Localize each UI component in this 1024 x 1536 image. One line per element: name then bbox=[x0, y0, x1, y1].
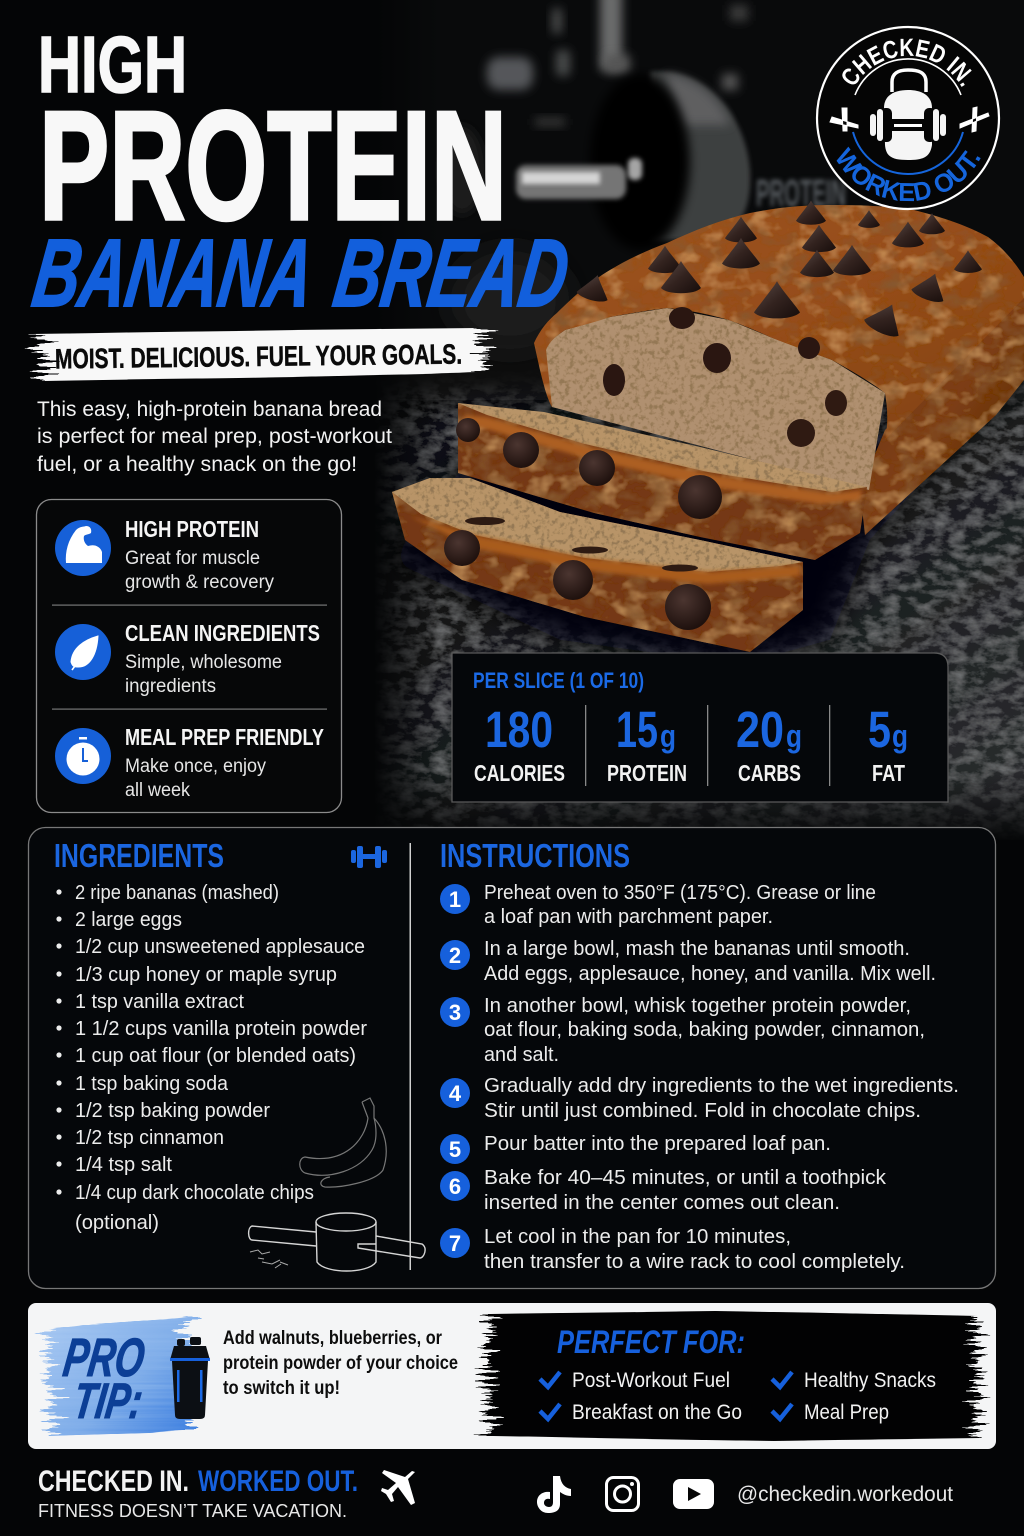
logo badge bbox=[816, 26, 1000, 210]
footer brand line: FITNESS DOESN’T TAKE VACATION. bbox=[38, 1501, 347, 1521]
instruction numbers: 7 bbox=[449, 1231, 461, 1256]
benefit: high protein: growth & recovery bbox=[125, 572, 274, 593]
illustration: bananas bbox=[300, 1098, 386, 1187]
ingredients list: 2 large eggs bbox=[75, 909, 182, 931]
ingredients list: 1 tsp baking soda bbox=[75, 1073, 229, 1095]
ingredients list: 1/4 cup dark chocolate chips bbox=[75, 1182, 314, 1204]
perfect for heading: PERFECT FOR: bbox=[557, 1324, 745, 1360]
ingredients list bbox=[56, 882, 367, 1234]
stat: calories: 180 bbox=[485, 701, 553, 758]
perfect for checklist bbox=[540, 1369, 936, 1424]
stat: carbs: g bbox=[786, 718, 802, 754]
panel: benefits bbox=[36, 500, 342, 812]
perfect for checklist: Meal Prep bbox=[804, 1401, 889, 1424]
left dark fade bbox=[0, 0, 440, 842]
intro text bbox=[37, 398, 392, 476]
stat: calories: CALORIES bbox=[474, 760, 565, 786]
stat: protein: PROTEIN bbox=[607, 760, 687, 786]
icon: youtube bbox=[673, 1479, 714, 1509]
instruction numbers: 1 bbox=[449, 887, 461, 912]
icon: plane bbox=[381, 1470, 415, 1505]
ingredients heading: INGREDIENTS bbox=[54, 837, 224, 874]
benefit: high protein: Great for muscle bbox=[125, 548, 260, 569]
pro tip text bbox=[223, 1328, 458, 1399]
instruction steps: and salt. bbox=[484, 1044, 559, 1066]
instruction steps: Stir until just combined. Fold in chocolate chips. bbox=[484, 1100, 921, 1122]
instructions heading: INSTRUCTIONS bbox=[440, 837, 630, 874]
instruction steps bbox=[484, 882, 959, 1273]
title bbox=[27, 20, 575, 327]
panel: nutrition per slice: PER SLICE (1 OF 10) bbox=[473, 668, 644, 693]
stat: protein: g bbox=[660, 718, 676, 754]
instruction steps: a loaf pan with parchment paper. bbox=[484, 906, 773, 928]
instruction steps: Bake for 40–45 minutes, or until a toothpick bbox=[484, 1167, 887, 1189]
icon: tiktok bbox=[537, 1476, 571, 1513]
instruction numbers: 2 bbox=[449, 943, 461, 968]
icon: shaker bottle bbox=[170, 1337, 210, 1419]
tagline brush banner bbox=[38, 328, 486, 381]
perfect for brush bbox=[486, 1311, 978, 1441]
stat: carbs: CARBS bbox=[738, 760, 801, 786]
ingredients list: 1/2 cup unsweetened applesauce bbox=[75, 936, 365, 958]
loaf cut face bbox=[544, 308, 885, 490]
stat: protein: 15 bbox=[616, 701, 658, 758]
panel: pro tip and perfect for bbox=[28, 1303, 996, 1449]
title: PROTEIN bbox=[39, 79, 507, 252]
badge bottom text: WORKED OUT. bbox=[836, 146, 981, 202]
bottom slice bbox=[392, 478, 803, 652]
pro tip text: Add walnuts, blueberries, or bbox=[223, 1328, 443, 1349]
instruction steps: oat flour, baking soda, baking powder, cinnamon, bbox=[484, 1019, 925, 1041]
badge top text: CHECKED IN. bbox=[842, 38, 972, 87]
icon: instagram bbox=[606, 1478, 638, 1510]
instruction numbers: 3 bbox=[449, 1000, 461, 1025]
badge planes bbox=[830, 108, 858, 131]
ingredients list: 1 cup oat flour (or blended oats) bbox=[75, 1045, 356, 1067]
blurred gym dumbbell backdrop: PROTEIN bbox=[756, 173, 846, 215]
panel: nutrition per slice bbox=[452, 653, 948, 802]
stat: fat bbox=[868, 701, 908, 786]
benefit: clean ingredients: CLEAN INGREDIENTS bbox=[125, 620, 320, 646]
instruction numbers bbox=[440, 884, 470, 1258]
ingredients list: 1 1/2 cups vanilla protein powder bbox=[75, 1018, 367, 1040]
stat: fat: 5 bbox=[868, 701, 891, 758]
tagline brush banner: MOIST. DELICIOUS. FUEL YOUR GOALS. bbox=[55, 339, 462, 374]
stat: fat: FAT bbox=[872, 760, 905, 786]
loaf top crust bbox=[534, 205, 1024, 440]
instruction steps: Pour batter into the prepared loaf pan. bbox=[484, 1133, 831, 1155]
stat: calories bbox=[474, 701, 565, 786]
instruction steps: Let cool in the pan for 10 minutes, bbox=[484, 1226, 791, 1248]
ingredients list: 1 tsp vanilla extract bbox=[75, 991, 244, 1013]
icon: dumbbell bbox=[351, 846, 387, 868]
social handle: @checkedin.workedout bbox=[737, 1483, 953, 1506]
pro tip brush bbox=[46, 1316, 188, 1436]
instruction numbers: 6 bbox=[449, 1174, 461, 1199]
title: BREAD bbox=[328, 220, 575, 327]
perfect for checklist: Breakfast on the Go bbox=[572, 1401, 742, 1424]
benefit: meal prep friendly: all week bbox=[125, 780, 190, 801]
hero photo: banana bread loaf and slices bbox=[390, 200, 1024, 665]
perfect for checklist: Post-Workout Fuel bbox=[572, 1369, 730, 1392]
benefit: clean ingredients bbox=[55, 620, 320, 697]
pro tip text: to switch it up! bbox=[223, 1378, 340, 1399]
footer brand line: CHECKED IN. bbox=[38, 1465, 189, 1498]
intro text: fuel, or a healthy snack on the go! bbox=[37, 453, 357, 476]
stat: protein bbox=[607, 701, 687, 786]
kettlebell and dumbbell mark bbox=[870, 70, 946, 160]
stat: carbs bbox=[736, 701, 802, 786]
instruction numbers: 5 bbox=[449, 1137, 461, 1162]
benefit: clean ingredients: Simple, wholesome bbox=[125, 652, 282, 673]
pro tip text: protein powder of your choice bbox=[223, 1353, 458, 1374]
ingredients list: 1/4 tsp salt bbox=[75, 1154, 172, 1176]
instruction steps: In a large bowl, mash the bananas until smooth. bbox=[484, 938, 910, 960]
title: HIGH bbox=[38, 20, 187, 109]
intro text: This easy, high-protein banana bread bbox=[37, 398, 382, 421]
instruction steps: Gradually add dry ingredients to the wet ingredients. bbox=[484, 1075, 959, 1097]
ingredients list: 1/3 cup honey or maple syrup bbox=[75, 964, 337, 986]
footer brand line bbox=[38, 1465, 358, 1521]
blurred gym dumbbell backdrop bbox=[330, 0, 1024, 350]
instruction numbers: 4 bbox=[449, 1081, 462, 1106]
benefit: high protein: HIGH PROTEIN bbox=[125, 516, 259, 542]
stat: fat: g bbox=[892, 718, 908, 754]
loaf chocolate chips bbox=[576, 200, 982, 447]
benefit: meal prep friendly bbox=[55, 724, 324, 801]
pro tip label: PRO bbox=[60, 1328, 148, 1388]
intro text: is perfect for meal prep, post-workout bbox=[37, 425, 392, 448]
pro tip label: TIP: bbox=[70, 1373, 146, 1429]
panel: recipe bbox=[28, 828, 996, 1288]
ingredients list: 1/2 tsp cinnamon bbox=[75, 1127, 224, 1149]
instruction steps: inserted in the center comes out clean. bbox=[484, 1192, 840, 1214]
footer brand line: WORKED OUT. bbox=[198, 1465, 358, 1498]
instruction steps: Add eggs, applesauce, honey, and vanilla. Mix well. bbox=[484, 963, 936, 985]
instruction steps: then transfer to a wire rack to cool completely. bbox=[484, 1251, 905, 1273]
title: BANANA bbox=[27, 220, 320, 327]
ingredients list: 1/2 tsp baking powder bbox=[75, 1100, 270, 1122]
top slice bbox=[456, 403, 867, 560]
ingredients list: (optional) bbox=[75, 1212, 159, 1234]
perfect for checklist: Healthy Snacks bbox=[804, 1369, 936, 1392]
pro tip label bbox=[60, 1328, 148, 1429]
benefit: meal prep friendly: Make once, enjoy bbox=[125, 756, 266, 777]
benefit: clean ingredients: ingredients bbox=[125, 676, 216, 697]
loaf side crust bbox=[860, 295, 1024, 535]
instruction steps: Preheat oven to 350°F (175°C). Grease or line bbox=[484, 882, 876, 904]
ingredients list: 2 ripe bananas (mashed) bbox=[75, 882, 279, 904]
illustration: measuring cup bbox=[249, 1213, 425, 1271]
benefit: high protein bbox=[55, 516, 274, 593]
stat: carbs: 20 bbox=[736, 701, 784, 758]
benefit: meal prep friendly: MEAL PREP FRIENDLY bbox=[125, 724, 324, 750]
instruction steps: In another bowl, whisk together protein powder, bbox=[484, 995, 911, 1017]
